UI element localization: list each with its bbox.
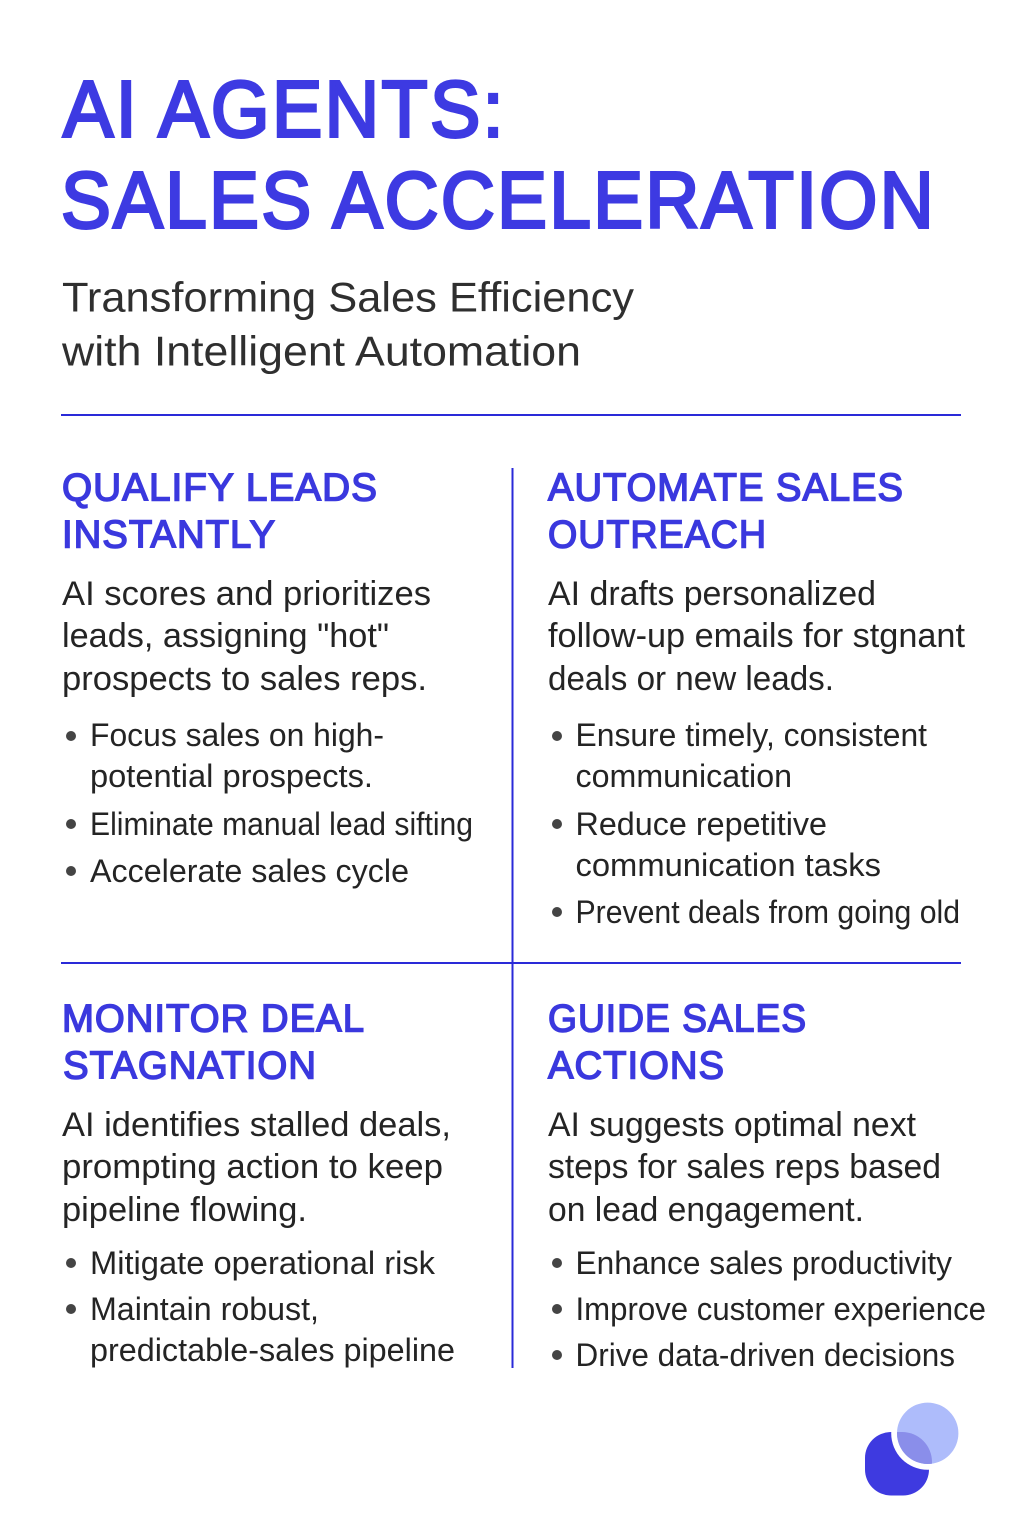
bullet list: guide sales benefits: Improve customer experience [576, 1291, 986, 1327]
heading: guide sales actions: ACTIONS [548, 1044, 725, 1088]
text: guide sales description: on lead engagement. [548, 1191, 864, 1229]
bullet list: guide sales benefits: Drive data-driven decisions [576, 1337, 955, 1373]
bullet list: monitor deal benefits [66, 1245, 455, 1368]
icon: overlapping shapes logo [865, 1402, 958, 1496]
title: AI AGENTS: [63, 65, 506, 154]
subtitle: Transforming Sales Efficiency [62, 274, 634, 320]
text: monitor deal description: pipeline flowing. [62, 1191, 307, 1229]
bullet list: monitor deal benefits: predictable-sales pipeline [90, 1332, 455, 1368]
bullet list: automate outreach benefits: Ensure timely, consistent [576, 717, 927, 753]
bullet list: automate outreach benefits: communication tasks [576, 847, 881, 883]
subtitle [61, 274, 634, 374]
text: guide sales description: steps for sales reps based [548, 1148, 941, 1186]
text: qualify leads description: leads, assigning "hot" [62, 617, 389, 655]
text: guide sales description: AI suggests optimal next [548, 1106, 916, 1144]
bullet list: qualify leads benefits: Focus sales on high- [90, 717, 384, 753]
bullet list: qualify leads benefits [66, 717, 473, 889]
text: qualify leads description: prospects to sales reps. [62, 660, 427, 698]
text: monitor deal description: AI identifies stalled deals, [62, 1106, 451, 1144]
text: automate outreach description: follow-up emails for stgnant [548, 617, 965, 655]
title [61, 65, 936, 245]
text: qualify leads description [62, 575, 431, 698]
text: automate outreach description: deals or new leads. [548, 660, 834, 698]
heading: guide sales actions [548, 998, 807, 1088]
heading: monitor deal stagnation [62, 998, 365, 1088]
bullet list: guide sales benefits [552, 1245, 986, 1373]
text: monitor deal description [62, 1106, 451, 1229]
panel: monitor deal stagnation [62, 998, 455, 1368]
heading: automate sales outreach: AUTOMATE SALES [548, 466, 904, 510]
heading: monitor deal stagnation: MONITOR DEAL [62, 998, 365, 1040]
panel: guide sales actions [548, 998, 986, 1373]
bullet list: guide sales benefits: Enhance sales productivity [576, 1245, 952, 1281]
panel: qualify leads [62, 466, 473, 889]
bullet list: monitor deal benefits: Mitigate operational risk [90, 1245, 436, 1281]
heading: qualify leads instantly [62, 466, 378, 556]
text: automate outreach description: AI drafts personalized [548, 575, 876, 613]
bullet list: automate outreach benefits [552, 717, 960, 930]
heading: automate sales outreach: OUTREACH [548, 514, 767, 556]
bullet list: automate outreach benefits: Reduce repetitive [576, 806, 827, 842]
text: qualify leads description: AI scores and prioritizes [62, 575, 431, 613]
heading: guide sales actions: GUIDE SALES [548, 998, 807, 1040]
heading: monitor deal stagnation: STAGNATION [63, 1044, 317, 1088]
panel: automate sales outreach [548, 466, 965, 930]
bullet list: monitor deal benefits: Maintain robust, [90, 1291, 319, 1327]
heading: qualify leads instantly: INSTANTLY [62, 514, 276, 556]
bullet list: automate outreach benefits: communication [576, 758, 792, 794]
text: automate outreach description [548, 575, 965, 698]
bullet list: automate outreach benefits: Prevent deals from going old [576, 894, 960, 930]
bullet list: qualify leads benefits: potential prospects. [90, 758, 373, 794]
heading: automate sales outreach [548, 466, 904, 556]
text: monitor deal description: prompting action to keep [62, 1148, 443, 1186]
bullet list: qualify leads benefits: Accelerate sales cycle [90, 853, 409, 889]
text: guide sales description [548, 1106, 941, 1229]
subtitle: with Intelligent Automation [61, 328, 581, 374]
title: SALES ACCELERATION [61, 156, 936, 245]
bullet list: qualify leads benefits: Eliminate manual lead sifting [90, 806, 473, 842]
heading: qualify leads instantly: QUALIFY LEADS [62, 466, 378, 510]
